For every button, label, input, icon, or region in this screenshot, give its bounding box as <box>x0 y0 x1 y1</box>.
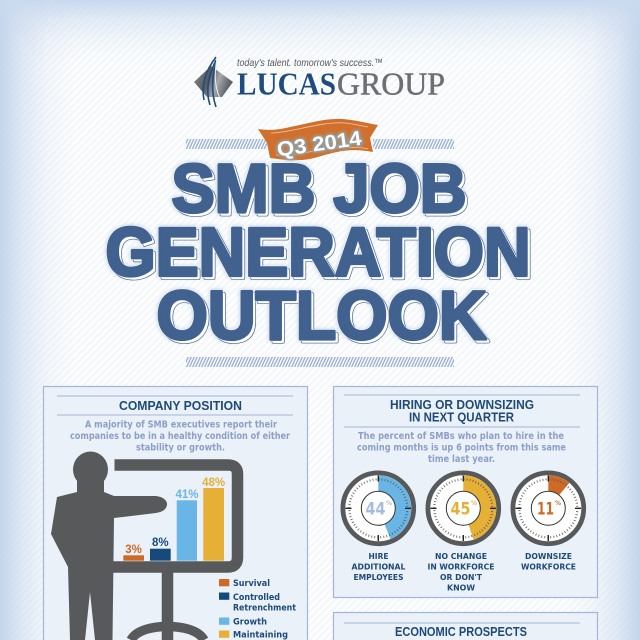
gauge: downsize 11%: 11 <box>537 500 554 520</box>
label: no change in workforce <box>428 552 494 592</box>
icon: presenter silhouette <box>51 452 167 640</box>
heading: company position: COMPANY POSITION <box>119 399 242 413</box>
legend: Retrenchment <box>233 604 297 614</box>
title line: SMB JOB: SMB JOB <box>174 152 469 230</box>
intro text: company position: stability or growth. <box>136 442 225 454</box>
label: hire additional employees <box>352 552 406 582</box>
gauge: hire 44%: 44 <box>366 500 386 520</box>
legend: Controlled <box>233 593 280 603</box>
ribbon: Q3 2014: Q3 2014 <box>275 127 363 161</box>
title line: GENERATION: GENERATION <box>106 214 530 290</box>
gauge: no change 45%: 45 <box>450 500 470 520</box>
tagline: today's talent. tomorrow's success.™ <box>237 57 383 69</box>
label: downsize workforce <box>521 552 576 572</box>
wordmark: LUCAS <box>237 66 336 102</box>
bar: growth 41%: 41% <box>175 489 199 501</box>
label: hire additional employees: EMPLOYEES <box>354 573 404 582</box>
panel: economic prospects <box>334 612 598 640</box>
gauge: downsize 11%: % <box>555 500 561 507</box>
intro text: company position: A majority of SMB executives report their <box>85 420 277 430</box>
wordmark <box>237 66 445 102</box>
intro text: company position: companies to be in a healthy condition of either <box>70 431 290 442</box>
title line: GENERATION: GENERATION <box>108 216 533 293</box>
label: downsize workforce: WORKFORCE <box>521 562 576 572</box>
gauge: no change 45% <box>428 473 499 544</box>
icon: presentation board <box>112 465 238 640</box>
bar: controlled retrenchment 8%: 8% <box>152 537 169 549</box>
decorative hatch left of ribbon <box>186 139 267 149</box>
icon: logo diamond <box>194 57 233 107</box>
title line: SMB JOB: SMB JOB <box>174 152 469 230</box>
gauge: downsize 11% <box>513 473 584 544</box>
legend: Growth <box>233 618 267 628</box>
label: no change in workforce: OR DON'T <box>440 573 483 582</box>
title line: SMB JOB: SMB JOB <box>172 150 466 227</box>
title line: GENERATION: GENERATION <box>106 214 530 290</box>
decorative hatch right of ribbon <box>373 139 454 149</box>
ribbon: Q3 2014: Q3 2014 <box>275 127 363 161</box>
title line: GENERATION: GENERATION <box>106 214 530 290</box>
logo: Lucas Group <box>194 57 445 107</box>
legend <box>219 579 297 640</box>
heading: hiring or downsizing <box>390 398 534 424</box>
title line: OUTLOOK: OUTLOOK <box>156 277 486 354</box>
bar: maintaining 48%: 48% <box>202 477 225 489</box>
title line: SMB JOB: SMB JOB <box>172 150 466 227</box>
wordmark: GROUP <box>337 66 445 102</box>
heading: economic prospects: ECONOMIC PROSPECTS <box>395 625 527 639</box>
label: no change in workforce: KNOW <box>447 584 475 592</box>
bar: survival 3%: 3% <box>125 544 142 556</box>
intro text: hiring: coming months is up 6 points from this same <box>357 442 566 454</box>
intro text: company position <box>70 420 290 454</box>
intro text: hiring: time last year. <box>428 454 495 465</box>
legend: Survival <box>233 579 270 589</box>
title line: SMB JOB: SMB JOB <box>172 150 466 227</box>
label: hire additional employees: HIRE <box>368 552 388 561</box>
gauge: hire 44%: % <box>386 500 392 507</box>
title line: OUTLOOK: OUTLOOK <box>156 277 486 354</box>
gauge: no change 45%: % <box>471 500 477 507</box>
heading: hiring or downsizing: HIRING OR DOWNSIZING <box>390 398 534 412</box>
intro text: hiring <box>357 431 566 465</box>
gauge labels <box>352 552 576 592</box>
heading: hiring or downsizing: IN NEXT QUARTER <box>409 410 514 424</box>
ribbon: Q3 2014 <box>256 118 380 161</box>
panel: company position <box>44 386 308 640</box>
decorative hatch under title <box>186 357 454 367</box>
title line: OUTLOOK: OUTLOOK <box>159 280 489 356</box>
label: no change in workforce: IN WORKFORCE <box>428 562 494 572</box>
panel: hiring or downsizing <box>334 386 598 598</box>
title line: OUTLOOK: OUTLOOK <box>156 277 486 354</box>
title <box>106 150 533 356</box>
label: no change in workforce: NO CHANGE <box>435 552 487 561</box>
title line: OUTLOOK: OUTLOOK <box>159 280 489 356</box>
title line: GENERATION: GENERATION <box>108 216 533 293</box>
label: downsize workforce: DOWNSIZE <box>525 552 572 561</box>
bar chart: company position <box>123 477 225 561</box>
label: hire additional employees: ADDITIONAL <box>352 562 406 572</box>
intro text: hiring: The percent of SMBs who plan to hire in the <box>358 431 564 442</box>
gauge: hire 44% <box>343 473 414 544</box>
